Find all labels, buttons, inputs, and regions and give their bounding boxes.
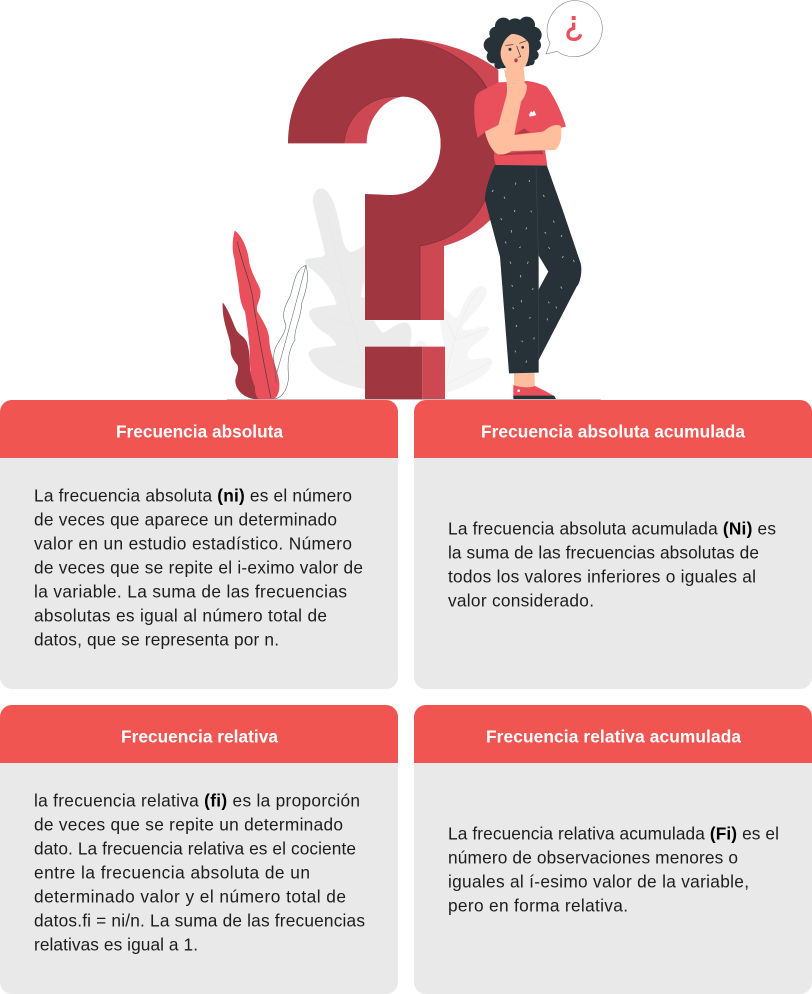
shirt logo xyxy=(529,110,536,117)
illustration: person thinking beside a question mark xyxy=(223,1,602,400)
neck xyxy=(505,65,525,85)
text block: entre la frecuencia absoluta de un xyxy=(34,862,310,882)
panel: Frecuencia relativa acumulada xyxy=(414,705,812,994)
question mark: dot xyxy=(365,347,445,399)
background leaf: large xyxy=(305,188,411,389)
panel: Frecuencia relativa xyxy=(0,705,398,994)
heading: Frecuencia relativa xyxy=(121,726,278,746)
speech bubble xyxy=(546,1,602,57)
heading: Frecuencia relativa acumulada xyxy=(486,726,741,746)
arm and hand xyxy=(485,68,561,155)
heading: Frecuencia absoluta xyxy=(116,422,283,442)
text block: valor considerado. xyxy=(448,590,594,610)
face details xyxy=(505,41,527,62)
background leaf: small lobe xyxy=(415,341,426,352)
text block: de veces que aparece un determinado xyxy=(34,510,337,530)
shirt shading xyxy=(498,128,543,156)
question mark: inner hook xyxy=(344,97,403,143)
inverted question mark icon xyxy=(568,16,581,39)
face xyxy=(501,34,529,72)
text block: pero en forma relativa. xyxy=(448,896,628,916)
person xyxy=(474,17,581,399)
text block: número de observaciones menores o xyxy=(448,848,738,868)
text block xyxy=(34,790,365,954)
background leaf: small xyxy=(440,286,493,393)
text block: dato. La frecuencia relativa es el cociente xyxy=(34,838,356,858)
text block: determinado valor y el número total de xyxy=(34,886,346,906)
panel: Frecuencia absoluta acumulada xyxy=(414,400,812,689)
shoe xyxy=(513,385,556,399)
text block: La frecuencia relativa acumulada (Fi) es el xyxy=(448,824,779,844)
text block: La frecuencia absoluta acumulada (Ni) es xyxy=(448,518,776,538)
heading: Frecuencia absoluta acumulada xyxy=(481,422,745,442)
panel: Frecuencia absoluta xyxy=(0,400,398,689)
text block: la suma de las frecuencias absolutas de xyxy=(448,542,759,562)
text block: relativas es igual a 1. xyxy=(34,934,198,954)
text block: de veces que se repite un determinado xyxy=(34,814,343,834)
text block: datos.fi = ni/n. La suma de las frecuencias xyxy=(34,910,365,930)
leg skin xyxy=(514,372,535,388)
question mark: back face xyxy=(397,38,500,320)
text block: absolutas es igual al número total de xyxy=(34,606,327,626)
text block: La frecuencia absoluta (ni) es el número xyxy=(34,486,352,506)
text block: datos, que se representa por n. xyxy=(34,630,279,650)
text block: de veces que se repite el i-eximo valor de xyxy=(34,558,363,578)
text block xyxy=(448,518,776,610)
text block xyxy=(34,486,363,650)
shirt xyxy=(474,81,566,166)
trousers xyxy=(485,165,581,373)
question mark: front face xyxy=(288,38,497,320)
text block: la variable. La suma de las frecuencias xyxy=(34,582,347,602)
text block: iguales al í-esimo valor de la variable, xyxy=(448,872,749,892)
plant: outline leaf xyxy=(274,265,307,399)
question mark: hole xyxy=(365,97,441,233)
text block: valor en un estudio estadístico. Número xyxy=(34,534,352,554)
hair xyxy=(484,17,542,69)
text block xyxy=(448,824,779,916)
plant: dark leaf xyxy=(223,302,260,399)
plant: red leaf xyxy=(233,231,279,399)
text block: todos los valores inferiores o iguales al xyxy=(448,566,756,586)
text block: la frecuencia relativa (fi) es la proporción xyxy=(34,790,360,810)
ground line xyxy=(227,398,601,401)
